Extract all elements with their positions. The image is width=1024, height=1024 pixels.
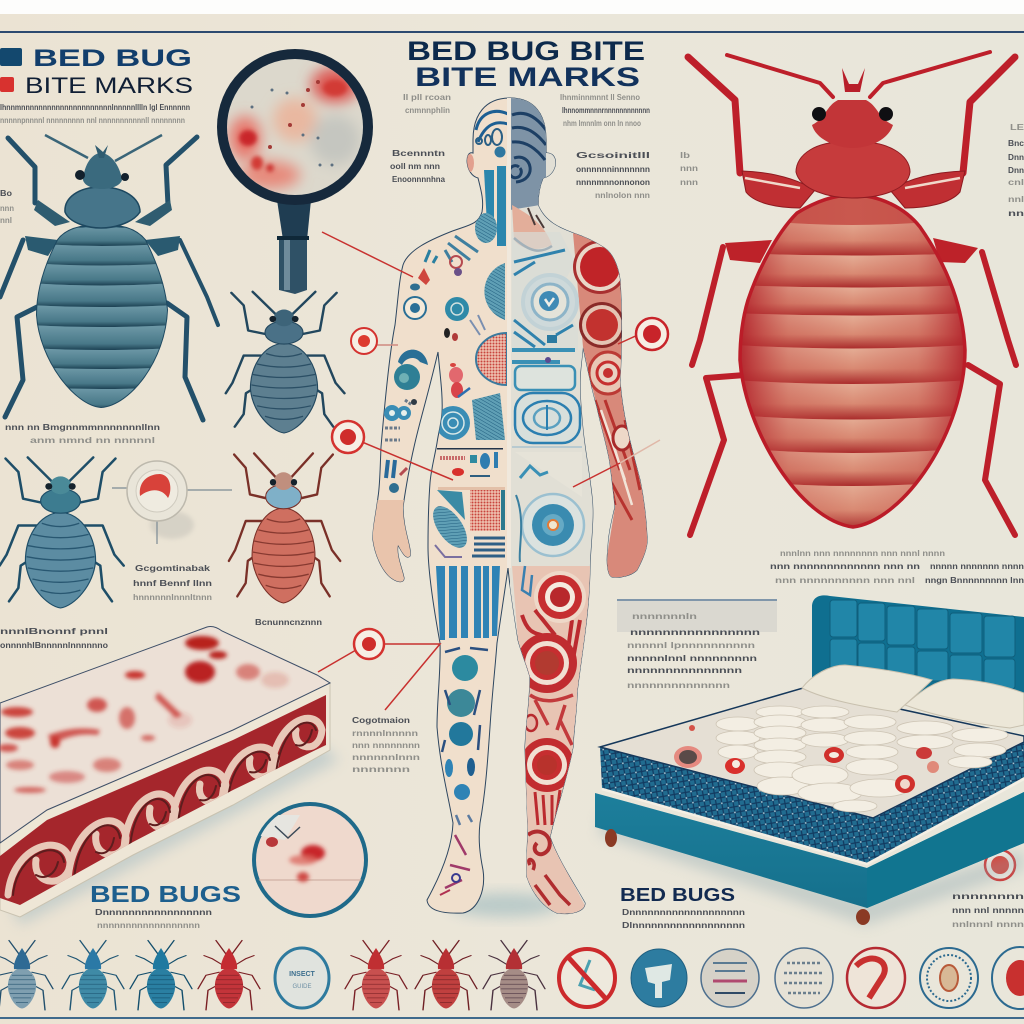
small caption text blocks: nnl	[0, 216, 12, 225]
small caption text blocks: nhm lmnnlm onn ln nnoo	[563, 119, 641, 128]
small caption text blocks: Dnnnnnnnnnnnnnnnnnnn	[622, 908, 745, 917]
small caption text blocks: onnnnhlBnnnnnlnnnnnno	[0, 641, 108, 650]
small caption text blocks: Enoonnnnhna	[392, 175, 446, 184]
small caption text blocks: hnnnnnnlnnnltnnn	[133, 593, 212, 602]
red bug lower	[229, 453, 340, 603]
large blue bed bug	[0, 135, 218, 420]
bottom row bug three	[130, 940, 192, 1010]
small caption text blocks: nnnnnpnnnnl nnnnnnnnn nnl nnnnnnnnnnnll nnnnnnnn	[0, 116, 185, 125]
grey badge one	[701, 949, 759, 1007]
large red bed bug	[688, 52, 1016, 535]
left arm markings	[384, 350, 428, 493]
small caption text blocks: nnnnnnn	[352, 765, 410, 774]
small caption text blocks: nnn	[0, 204, 14, 213]
small caption text blocks: Bnc	[1008, 139, 1024, 148]
small caption text blocks: rnnnnlnnnnn	[352, 729, 418, 738]
small caption text blocks: Dlnnnnnnnnnnnnnnnnnn	[622, 921, 745, 930]
bottom row bug seven	[483, 940, 545, 1010]
small caption text blocks: nngn Bnnnnnnnnn lnn	[925, 576, 1024, 585]
human figure with bite marks	[365, 90, 660, 930]
callout lines	[318, 232, 660, 710]
small caption text blocks: LE	[1010, 123, 1024, 132]
heading: centre title: BED BUG BITE	[407, 36, 645, 66]
bed bugs labels: BED BUGS	[90, 881, 241, 907]
small caption text blocks: Bcennntn	[392, 149, 445, 158]
small caption text blocks: nnnlBnonnf pnnl	[0, 627, 108, 636]
bed bugs labels: BED BUGS	[620, 885, 735, 905]
bottom row bug four	[198, 940, 260, 1010]
right hip markings	[512, 447, 584, 562]
heading: centre title: BITE MARKS	[415, 62, 640, 92]
blurred caption panel above bed: nnnnnl lpnnnnnnnnnn	[627, 641, 755, 650]
right half skin tone	[510, 98, 648, 914]
small caption text blocks: Dnn	[1008, 153, 1024, 162]
right chest markings	[512, 232, 580, 443]
shadow under bed	[600, 815, 1024, 925]
small caption text blocks: nnn nnnnnnnnnnnnn nnn nn	[770, 562, 920, 571]
bottom row badge: text: INSECT	[289, 971, 316, 978]
prohibition badge	[559, 949, 615, 1007]
blue bug lower left	[0, 457, 124, 608]
small caption text blocks: nnnlnn nnn nnnnnnnn nnn nnnl nnnn	[780, 549, 945, 558]
small caption text blocks: Gcsoinitlll	[576, 151, 650, 160]
top white strip	[0, 0, 1024, 14]
bottom row badge: text: GUIDE	[292, 984, 312, 990]
small caption text blocks: Bcnunncnznnn	[255, 618, 322, 627]
bottom row badge: text	[275, 948, 329, 1008]
small caption text blocks: nnn	[680, 178, 698, 187]
small caption text blocks: Ihnnmnnnnnnnnnnnnnnnnnnnnnlnnnnnlllln lgl Ennnnnn	[0, 103, 190, 112]
grey badge two	[775, 948, 833, 1008]
small caption text blocks: nn	[1008, 209, 1024, 218]
small caption text blocks: onnnnnninnnnnnn	[576, 165, 650, 174]
heading: centre title	[407, 36, 645, 92]
hand and arm skin tones	[365, 233, 660, 590]
blurred caption panel above bed: nnnnnnnln	[632, 612, 697, 621]
small caption text blocks: cnl	[1008, 178, 1024, 187]
small caption text blocks: nnlnolon nnn	[595, 191, 650, 200]
small caption text blocks: nnn nnnnnnnn	[352, 741, 420, 750]
callout markers	[332, 318, 1015, 880]
bottom row bug six	[415, 940, 477, 1010]
centre seam of figure	[507, 98, 511, 568]
blurred caption panel above bed	[617, 599, 777, 690]
heading: left title	[0, 45, 193, 98]
bed with headboard, pillows and marked mattress	[595, 595, 1024, 925]
bottom rule	[0, 1017, 1024, 1019]
blurred caption panel above bed: nnnnnnnnnnnnnnn	[627, 666, 742, 675]
small caption text blocks: ooll nm nnn	[390, 162, 440, 171]
bottom row bug five	[345, 940, 407, 1010]
small caption text blocks: lb	[680, 151, 690, 160]
head markings	[466, 98, 546, 210]
small caption text blocks: cnmnnphlin	[405, 106, 450, 115]
blurred caption panel above bed: nnnnnlnnl nnnnnnnnn	[627, 654, 757, 663]
small caption text blocks: Dnnnnnnnnnnnnnnnnn	[95, 908, 212, 917]
heading: left title: BED BUG	[33, 45, 192, 72]
small caption text blocks: nnnnnnlnnn	[352, 753, 420, 762]
cropped seal badge	[992, 947, 1024, 1009]
small caption text blocks: Ihnminnmnnt ll Senno	[560, 93, 640, 102]
top rule	[0, 31, 1024, 33]
small caption text blocks: nnn nnl nnnnn	[952, 906, 1024, 915]
shadow under the figure's feet	[450, 893, 560, 917]
left abdomen markings	[426, 393, 505, 557]
blue badge	[631, 949, 687, 1007]
blurred caption panel above bed: nnnnnnnnnnnnnn	[627, 681, 730, 690]
bottom row bug two	[62, 940, 124, 1010]
heading: left title: BITE MARKS	[25, 73, 193, 98]
small caption text blocks: Bo	[0, 189, 12, 198]
small caption text blocks: nnl	[1008, 195, 1024, 204]
small caption text blocks: nnlnnnl nnnn	[952, 920, 1024, 929]
circular skin detail with pointer lines	[112, 461, 232, 544]
small caption text blocks: nnnnn nnnnnnn nnnn	[930, 562, 1024, 571]
magnifying glass with bite close-up	[217, 49, 373, 294]
small caption text blocks: Gcgomtinabak	[135, 564, 211, 573]
right arm bite rings	[573, 240, 640, 520]
left leg markings	[436, 566, 500, 895]
right leg bite rings	[512, 566, 592, 915]
small caption text blocks: nnn nnnnnnnnnn nnn nnl	[775, 576, 915, 585]
small caption text blocks: Dnn	[1008, 166, 1024, 175]
small caption text blocks: nnnnnnnnnnnnnnnnnn	[97, 921, 200, 930]
small caption text blocks: anm nmnd nn nnnnnl	[30, 436, 155, 445]
small caption text blocks: Il pll rcoan	[403, 93, 451, 102]
left chest markings	[404, 236, 507, 398]
round skin close-up	[252, 802, 368, 918]
red stroke badge	[847, 948, 905, 1008]
neck markings	[475, 166, 552, 251]
bottom row of bugs: blue	[0, 940, 53, 1010]
stained mattress cross-section	[0, 626, 340, 925]
target seal badge	[920, 948, 978, 1008]
small caption text blocks: nnn nn Bmgnnmmnnnnnnnllnn	[5, 423, 160, 432]
small caption text blocks: nnn	[680, 164, 698, 173]
small caption text blocks: hnnf Bennf llnn	[133, 579, 212, 588]
small caption text blocks: nnnnnnnn	[952, 892, 1024, 901]
small caption text blocks: nnnnmnnonnonon	[576, 178, 650, 187]
small caption text blocks: Cogotmaion	[352, 716, 410, 725]
bed bugs labels	[90, 881, 735, 907]
blurred caption panel above bed: nnnnnnnnnnnnnnnn	[630, 628, 760, 637]
small blue bug	[226, 292, 344, 433]
small caption text blocks: Ihnnommnnnrnnnnnnnnnnnn	[562, 106, 650, 115]
